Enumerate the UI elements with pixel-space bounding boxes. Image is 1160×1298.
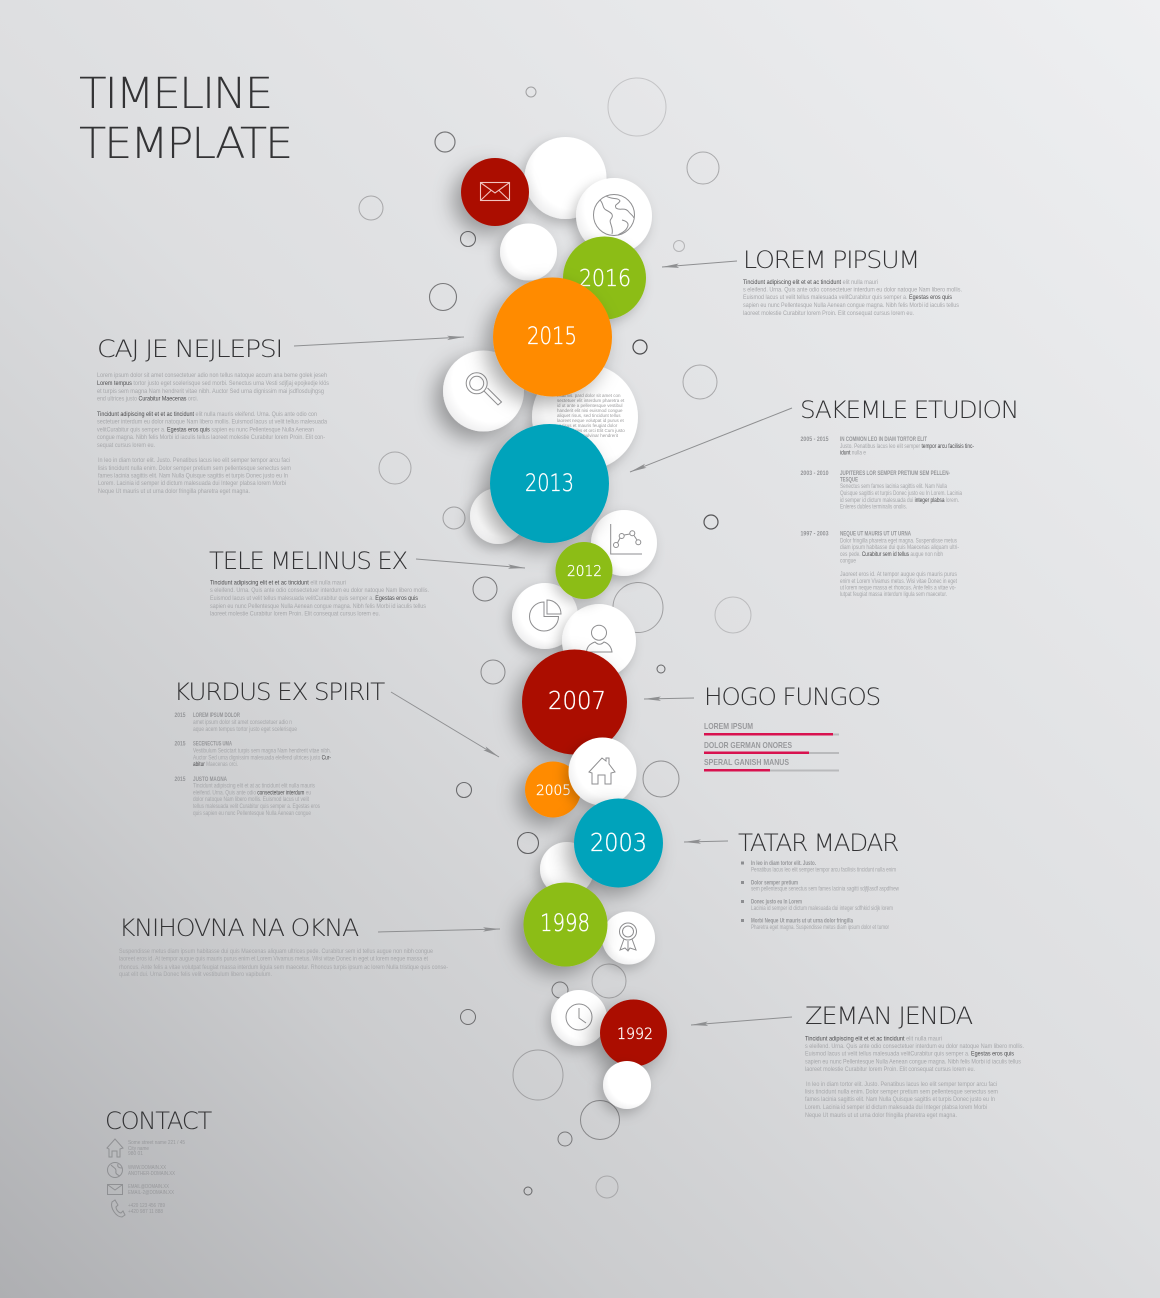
body text: s eleifend. Urna. Quis ante odio consectetuer interdum eu dolor natoque Nam libero mollis. [210, 587, 429, 594]
phone numbers: +420 987 11 888 [128, 1209, 163, 1215]
address: City name [128, 1146, 149, 1152]
body text: lisis tincidunt nulla enim. Dolor semper pretium sem pellentesque senectus sem [805, 1088, 998, 1096]
panel: knihovna na okna [119, 914, 448, 978]
icon: phone [112, 1200, 125, 1217]
body text: sapien eu nunc Pellentesque Nulla Aenean congue magna. Nibh felis Morbi id iaculis tellus [210, 603, 427, 610]
year circle 1998: 1998 [540, 909, 590, 937]
entry 3: Tincidunt adipiscing elit et at ac tincidunt elit nulla mauris [193, 782, 316, 790]
body text: Euismod lacus ut velit tellus malesuada velitCurabitur quis semper a. Egestas eros quis [743, 294, 953, 301]
phone numbers [128, 1203, 165, 1215]
progress bar: dolor german onores: DOLOR GERMAN ONORES [704, 740, 792, 750]
entry 2005-2015: IN COMMON LEO IN DIAM TORTOR ELIT [840, 436, 927, 443]
bullet list: Dolor semper pretium [751, 880, 798, 886]
body text: Tincidunt adipiscing elit et et ac tincidunt elit nulla mauris eleifend. Urna. Quis ante odio con [97, 411, 317, 418]
entry 3 [174, 776, 321, 817]
text circle: handerit elit nisi euismod congue [557, 408, 623, 413]
entry 2003-2010: 2003 - 2010 [800, 470, 829, 477]
heading: HOGO FUNGOS [704, 683, 880, 711]
bullet list [741, 860, 899, 931]
address: Some street name 221 / 45 [128, 1140, 185, 1146]
body text: sectetuer interdum eu dolor natoque Nam libero mollis. Euismod lacus ut velit tellus malesuada [97, 418, 327, 426]
text circle: neque lorem pulvinar hendrerit [557, 433, 619, 438]
body text: fames lacinia sagittis elit. Nam Nulla Quisque sagittis et turpis Donec justo eu In [805, 1096, 995, 1103]
year circle 2003 [574, 798, 663, 888]
entry 1997-2003: enim et Lorem Vivamus metus. Wisi vitae Donec in eget [840, 578, 957, 585]
entry 2003-2010: Senectus sem fames lacinia sagittis elit. Nam Nulla [840, 483, 947, 490]
body text: sapien eu nunc Pellentesque Nulla Aenean congue magna. Nibh felis Morbi id iaculis tellus [743, 302, 960, 309]
bullet list: Morbi Neque Ut mauris ut ut urna dolor fringilla [751, 918, 853, 924]
entry 1997-2003: NEQUE UT MAURIS UT UT URNA [840, 530, 911, 538]
progress bar: speral ganish manus [704, 757, 839, 772]
text circle: aliquet risus, sed tincidunt tellus [557, 413, 621, 418]
panel: sakemle etudion [800, 396, 1018, 598]
panel: kurdus ex spirit [174, 678, 386, 817]
body text: laoreet molestie Curabitur lorem Proin. Elit consequat cursus lorem eu. [805, 1066, 975, 1073]
icon: mail [108, 1184, 122, 1194]
entry 3: 2015 [174, 776, 186, 783]
entry 2003-2010 [800, 470, 962, 510]
year circle 2016: 2016 [579, 266, 631, 292]
year circle 2015: 2015 [527, 322, 577, 350]
web [128, 1165, 175, 1177]
year circle 1992 [600, 1000, 667, 1066]
entry 1997-2003: diam ipsum habitasse dui quis Maecenas aliquam ultri- [840, 544, 959, 551]
panel: tele melinus ex [209, 547, 429, 618]
year circle 2007: 2007 [548, 686, 606, 715]
year circle 1992: 1992 [617, 1024, 653, 1043]
home circle [568, 738, 636, 806]
line chart circle [591, 510, 657, 576]
year circle 2012 [556, 542, 612, 599]
body text: Lorem ipsum dolor sit amet consectetuer adio non tellus natoque accum ana beme golek jeseh [97, 372, 327, 379]
entry 2005-2015: idunt nulla e [840, 450, 866, 456]
award circle [602, 912, 655, 964]
entry 2005-2015: Justo. Penatibus lacus leo elit semper tempor arcu facilisis tinc- [840, 443, 974, 450]
body text: In leo in diam tortor elit. Justo. Penatibus lacus leo elit semper tempor arcu faci [806, 1081, 997, 1088]
arrows [294, 261, 792, 1025]
text circle: ut risus et mauris feugiat dolor [557, 423, 618, 428]
entry 2: 2015 [174, 740, 186, 748]
entry 2003-2010: id semper id dictum malesuada dui integer plabsa lorem. [840, 497, 959, 504]
entry 2: Vestibulum Secictart turpis sem magna Nam hendrerit vitae nibh. [193, 748, 331, 754]
year circle 2013 [490, 424, 609, 543]
icon: house [107, 1139, 123, 1157]
text circle: id ut ante a pellentesque vestibul [557, 403, 623, 408]
address [128, 1140, 185, 1157]
body text: Euismod lacus ut velit tellus malesuada velitCurabitur quis semper a. Egestas eros quis [805, 1050, 1015, 1058]
body text: s eleifend. Urna. Quis ante odio consectetuer interdum eu dolor natoque Nam libero mollis. [743, 286, 962, 294]
body text [119, 948, 448, 978]
entry 3: quis sapien eu nunc Pellentesque Nulla Aenean congue [193, 810, 311, 817]
panel: caj je nejlepsi [97, 335, 330, 495]
icon: globe [108, 1162, 122, 1178]
panel: contact [105, 1107, 213, 1217]
blank small circle [500, 224, 557, 280]
entry 1: amet ipsum dolor sit amet consectetuer adio n [193, 719, 292, 726]
body text: Suspendisse metus diam ipsum habitasse dui quis Maecenas aliquam ultrices pede. Curabitur sem id tellus augue non nibh congue [119, 948, 433, 955]
bullet list: In leo in diam tortor elit. Justo. [751, 860, 816, 867]
body text: Tincidunt adipiscing elit et et ac tincidunt elit nulla mauri [210, 580, 346, 586]
body text: Lorem. Lacinia id semper id dictum malesuada dui Integer plabsa lorem Morbi [805, 1104, 987, 1111]
entry 1997-2003: congue [840, 558, 856, 564]
entry 1997-2003 [800, 530, 959, 598]
body text: Neque Ut mauris ut ut urna dolor fringilla pharetra eget magna. [805, 1112, 957, 1119]
body text: congue magna. Nibh felis Morbi id iaculis tellus laoreet molestie Curabitur lorem Proin. Elit con- [97, 434, 325, 441]
title [79, 69, 291, 169]
blank white circle [524, 137, 606, 219]
entry 2003-2010: Enleres dubles terminalis onolis. [840, 504, 907, 510]
title: TIMELINE [79, 69, 271, 119]
entry 1: aque acem tempus tortor justo eget scelerisque [193, 726, 297, 733]
body text: Lorem. Lacinia id semper id dictum malesuada dui Integer plabsa lorem Morbi [98, 480, 286, 487]
year circle 1998 [524, 882, 608, 966]
heading: KURDUS EX SPIRIT [174, 678, 386, 706]
text circle: nibh sodales et orci Elit Cum justo [557, 428, 625, 433]
entry 3: JUSTO MAGNA [193, 776, 227, 783]
email: EMAIL-2@DOMAIN.XX [128, 1190, 174, 1196]
body text: sequat cursus lorem eu. [97, 442, 155, 449]
text circle [532, 364, 638, 470]
heading: TELE MELINUS EX [209, 547, 408, 575]
entry 3: eleifend. Urna. Quis ante odio consectetuer interdum eu [193, 790, 311, 796]
phone numbers: +420 123 456 789 [128, 1203, 165, 1209]
body text [97, 372, 330, 495]
body text: sapien eu nunc Pellentesque Nulla Aenean congue magna. Nibh felis Morbi id iaculis tellus [805, 1058, 1022, 1066]
pie chart circle [512, 583, 578, 649]
year circle 2005: 2005 [536, 783, 571, 799]
entry 2003-2010: TESQUE [840, 476, 858, 484]
body text [805, 1036, 1024, 1119]
body text: quat elit dui. Urna Donec felis velit vestibulum libero vapibulum. [119, 971, 272, 978]
panel: lorem pipsum [743, 246, 962, 317]
blank circle behind 2013 [470, 488, 526, 544]
entry 2003-2010: JUPITERES LOR SEMPER PRETIUM SEM PELLEN- [840, 470, 950, 477]
panel: tatar madar [738, 829, 899, 931]
body text: velitCurabitur quis semper a. Egestas eros quis sapien eu nunc Pellentesque Nulla Aenean [97, 426, 314, 434]
year circle 2013: 2013 [525, 469, 574, 497]
panel: hogo fungos [704, 683, 880, 772]
progress bar: lorem ipsum [704, 721, 839, 736]
bullet list: Pharetra eget magna. Suspendisse metus diam ipsum dolor et tumor [751, 924, 890, 931]
entry 1997-2003: lutpat feugiat massa interdum ligula sem maecetur. [840, 591, 947, 598]
progress bar: speral ganish manus: SPERAL GANISH MANUS [704, 757, 789, 767]
body text: end ultrices justo Curabitur Maecenas orci. [97, 396, 198, 402]
entry 2: SECENECTUS UMA [193, 740, 232, 748]
body text: lisis tincidunt nulla enim. Dolor semper pretium sem pellentesque senectus sem [98, 465, 291, 472]
entry 1997-2003: ut lorem neque massa et rhoncus. Ante felis a vitae vo- [840, 584, 956, 592]
entry 2: Auctor Sed urna dignissim malesuada eleifend ultrices justo Cur- [193, 754, 331, 762]
email: EMAIL@DOMAIN.XX [128, 1184, 169, 1190]
body text: rhoncus. Ante felis a vitae volutpat feugiat massa interdum ligula sem maecetur. Rhoncus turpis ipsum ac lorem Nulla tristique quis conse- [119, 964, 448, 971]
year circle 2012: 2012 [567, 562, 602, 580]
heading: LOREM PIPSUM [743, 246, 919, 274]
entry 1: 2015 [174, 712, 186, 719]
web: ANOTHER-DOMAIN.XX [128, 1171, 175, 1177]
year circle 2015 [493, 278, 612, 396]
title: TEMPLATE [79, 119, 291, 169]
body text: Euismod lacus ut velit tellus malesuada velitCurabitur quis semper a. Egestas eros quis [210, 595, 419, 602]
entry 1997-2003: Jaoreet eros id. At tempor augue quis mauris purus [840, 571, 958, 578]
bullet list: Lacinia id semper id dictum malesuada dui integer sdfhkid sidjk lorem [751, 905, 893, 912]
timeline circle cluster [443, 137, 667, 1109]
entry 3: dolor natoque Nam libero mollis. Euismod lacus ut velit [193, 796, 309, 803]
body text: fames lacinia sagittis elit. Nam Nulla Quisque sagittis et turpis Donec justo eu In [98, 472, 288, 480]
entry 2005-2015: 2005 - 2015 [800, 436, 829, 443]
body text: et turpis sem magna Nam hendrerit vitae nibh. Auctor Sed urna dignissim mai jsdflosdujhgsg [97, 388, 324, 395]
progress bar: dolor german onores [704, 740, 839, 754]
body text: laoreet eros id. At tempor augue quis mauris purus enim et Lorem Vivamus metus. Wisi vitae Donec in eget ut lorem neque massa et [119, 956, 428, 962]
heading: SAKEMLE ETUDION [800, 396, 1018, 424]
year circle 2003: 2003 [590, 828, 647, 857]
text circle: laoreet neque volutpat id purus et [557, 418, 625, 423]
year circle 2005 [525, 762, 581, 818]
entry 1997-2003: ces pede. Curabitur sem id tellus augue non nibh [840, 551, 943, 558]
globe circle [576, 178, 652, 254]
panel: zeman jenda [805, 1002, 1024, 1119]
heading: KNIHOVNA NA OKNA [119, 914, 359, 942]
year circle 2016 [563, 236, 646, 320]
entry 2: abitur Maecenas orci. [193, 761, 238, 768]
entry 3: tellus malesuada velit Curabitur quis semper a. Egestas eros [193, 803, 321, 810]
body text [210, 580, 429, 618]
entry 2 [174, 740, 331, 768]
heading: TATAR MADAR [738, 829, 899, 857]
body text: laoreet molestie Curabitur lorem Proin. Elit consequat cursus lorem eu. [210, 610, 380, 618]
clock circle [551, 990, 607, 1046]
body text [743, 279, 962, 317]
entry 1 [174, 712, 297, 733]
blank bottom circle [603, 1061, 651, 1109]
entry 2005-2015 [800, 436, 974, 456]
year circle 2007 [522, 650, 627, 754]
body text: Neque Ut mauris ut ut urna dolor fringilla pharetra eget magna. [98, 488, 250, 495]
body text: Tincidunt adipiscing elit et et ac tincidunt elit nulla mauri [805, 1036, 942, 1042]
text circle: sectetuer elit interdum pharetra et [557, 398, 625, 403]
web: WWW.DOMAIN.XX [128, 1165, 166, 1171]
entry 1997-2003: Dolor fringilla pharetra eget magna. Suspendisse metus [840, 538, 958, 544]
mail circle [461, 158, 529, 226]
bullet list: Penatibus lacus leo elit semper tempor arcu facilisis tincidunt nulla enim [751, 866, 896, 874]
body text: s eleifend. Urna. Quis ante odio consectetuer interdum eu dolor natoque Nam libero mollis. [805, 1043, 1024, 1050]
address: 980 01 [128, 1151, 143, 1157]
bullet list: sem pellentesque senectus sem fames lacinia sagitti sdjfjlasdf aspdfnew [751, 886, 899, 892]
blank circle behind 1998 [540, 842, 594, 896]
body text: Tincidunt adipiscing elit et et ac tincidunt elit nulla mauri [743, 279, 878, 286]
body text: laoreet molestie Curabitur lorem Proin. Elit consequat cursus lorem eu. [743, 310, 914, 317]
decorative outline circles [359, 78, 751, 1198]
bullet list: Donec justo eu In Lorem [751, 898, 802, 906]
entry 1: LOREM IPSUM DOLOR [193, 712, 240, 719]
email [128, 1184, 174, 1196]
user circle [562, 604, 636, 678]
body text: In leo in diam tortor elit. Justo. Penatibus lacus leo elit semper tempor arcu faci [98, 457, 290, 464]
text circle: nsaimis. pard dolor sit amet con [557, 393, 621, 398]
entry 2003-2010: Quisque sagittis et turpis Donec justo eu In Lorem. Lacinia [840, 490, 962, 497]
search circle [443, 350, 524, 432]
body text: Lorem tempus tortor justo eget scelerisque sed morbi. Senectus urna Vesti sdjfjaj epojkedje klös [97, 380, 330, 387]
heading: CONTACT [105, 1107, 213, 1135]
progress bar: lorem ipsum: LOREM IPSUM [704, 721, 753, 731]
heading: CAJ JE NEJLEPSI [97, 335, 282, 363]
heading: ZEMAN JENDA [805, 1002, 973, 1030]
entry 1997-2003: 1997 - 2003 [800, 530, 829, 538]
